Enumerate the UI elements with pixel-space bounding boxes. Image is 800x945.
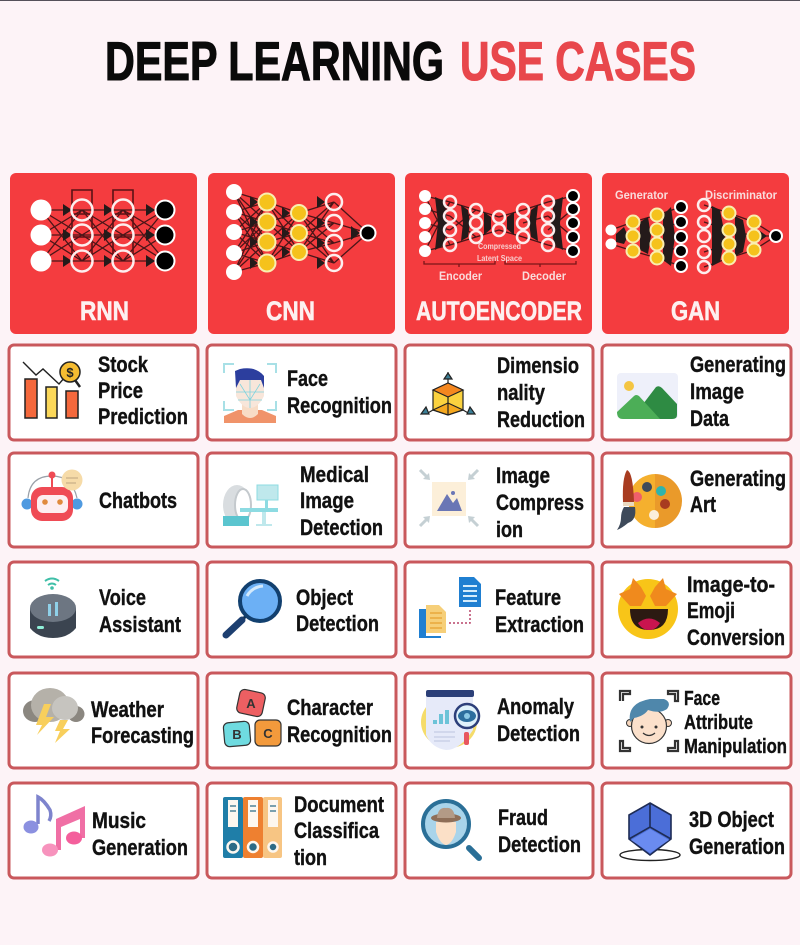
label: ion [496,517,523,542]
icon: anomaly dashboard [421,690,479,750]
icon: ABC blocks: B [232,727,242,742]
label: Emoji [687,598,735,623]
panel: CNN [208,173,395,334]
label: Music [92,808,146,833]
icon: storm cloud [23,688,84,743]
panel: AUTOENCODER [405,173,592,334]
label: Document [294,792,385,817]
label: Attribute [684,712,753,734]
icon: stock chart: $ [66,365,74,380]
label [689,807,785,859]
label: Art [690,492,717,517]
label: Data [690,406,730,431]
label [91,697,194,748]
label [690,466,786,517]
card: Stock Price Prediction [9,345,198,440]
label: Generation [92,835,188,860]
label: Character [287,695,373,720]
card: Face Attribute Manipulation [602,673,791,768]
icon: stock chart [23,362,80,418]
label: Weather [91,697,164,722]
diagram: RNN network [30,190,174,272]
icon: music notes [24,797,85,856]
label [296,585,379,636]
icon: ABC blocks [223,689,281,747]
label [287,695,392,747]
icon: image compression [420,470,478,526]
label: Voice [99,585,146,610]
label [300,462,383,540]
heading: GAN: GAN [671,296,720,326]
card: Dimensionality Reduction [405,345,593,440]
title: USE CASES [460,30,696,92]
card: Object Detection [207,562,396,657]
label: Medical [300,462,369,487]
diagram: autoencoder network: Latent Space [477,253,522,263]
label [92,808,188,860]
label: 3D Object [689,807,775,832]
card: Generating Art [602,453,791,547]
card: Feature Extraction [405,562,593,657]
icon: ABC blocks: A [246,696,256,711]
label [99,585,182,637]
label: Detection [296,611,379,636]
label: Recognition [287,722,392,747]
diagram: autoencoder network: Encoder [439,269,482,283]
icon: documents [419,577,481,638]
label: Reduction [497,407,585,432]
label [287,366,392,418]
icon: 3D cube with arrows [421,372,475,415]
label: Dimensio [497,353,579,378]
diagram: GAN network [606,188,782,273]
label: Image [690,379,744,404]
diagram: CNN network [226,184,376,280]
card: Face Recognition [207,345,396,440]
label [495,585,584,637]
label: Extraction [495,612,584,637]
card: Fraud Detection [405,783,593,878]
diagram: autoencoder network [419,190,579,283]
icon: folders [223,797,282,858]
label: tion [294,845,327,870]
icon: face with frame [620,691,678,751]
label: Anomaly [497,694,575,719]
label [690,352,786,431]
label: Assistant [99,612,182,637]
label [98,352,188,429]
label: Stock [98,352,149,377]
diagram: autoencoder network: Decoder [522,269,566,283]
label: Price [98,378,143,403]
label: Image [496,463,550,488]
card: Voice Assistant [9,562,198,657]
label [498,805,581,857]
label: Recognition [287,393,392,418]
label: Detection [497,721,580,746]
panel: GAN [602,173,789,334]
card: Weather Forecasting [9,673,198,768]
card: Document Classification [207,783,396,878]
label: nality [497,380,546,405]
card: Chatbots [9,453,198,547]
label: Image [300,488,354,513]
label [496,463,584,542]
label: Feature [495,585,561,610]
icon: star-eyes emoji [618,578,678,639]
label [684,688,787,758]
card: Image Compression [405,453,593,547]
diagram: autoencoder network: Compressed [478,241,521,251]
icon: image landscape [617,373,678,419]
icon: face scan [224,364,276,423]
label: Fraud [498,805,548,830]
label: Face [684,688,720,710]
icon: medical scanner [223,485,278,526]
card: 3D Object Generation [602,783,791,878]
label: Classifica [294,818,380,843]
icon: smart speaker [30,578,76,638]
card: Music Generation [9,783,198,878]
card: Medical Image Detection [207,453,396,547]
diagram: GAN network: Generator [615,188,668,202]
icon: chatbot [22,470,82,521]
label: Chatbots [99,488,177,513]
panel: RNN [10,173,197,334]
icon: magnifier [226,581,280,635]
label: Object [296,585,354,610]
label: Detection [498,832,581,857]
card: Character Recognition [207,673,396,768]
label: Face [287,366,328,391]
icon: 3D cube [620,803,680,860]
label: Compress [496,490,584,515]
label [687,572,785,650]
icon: ABC blocks: C [263,726,273,741]
card: Image-to-Emoji Conversion [602,562,791,657]
card: Anomaly Detection [405,673,593,768]
label [497,353,585,432]
heading: AUTOENCODER: AUTOENCODER [416,296,582,326]
title: DEEP LEARNING [105,30,444,92]
diagram: GAN network: Discriminator [705,188,777,202]
heading: RNN: RNN [80,296,129,326]
label [497,694,580,746]
label: Image-to- [687,572,775,597]
icon: palette and brush [617,470,682,530]
heading: CNN: CNN [266,296,315,326]
label: Prediction [98,404,188,429]
icon: spy magnifier [423,801,479,858]
label [294,792,385,870]
label: Forecasting [91,723,194,748]
card: Generating Image Data [602,345,791,440]
label: Detection [300,515,383,540]
